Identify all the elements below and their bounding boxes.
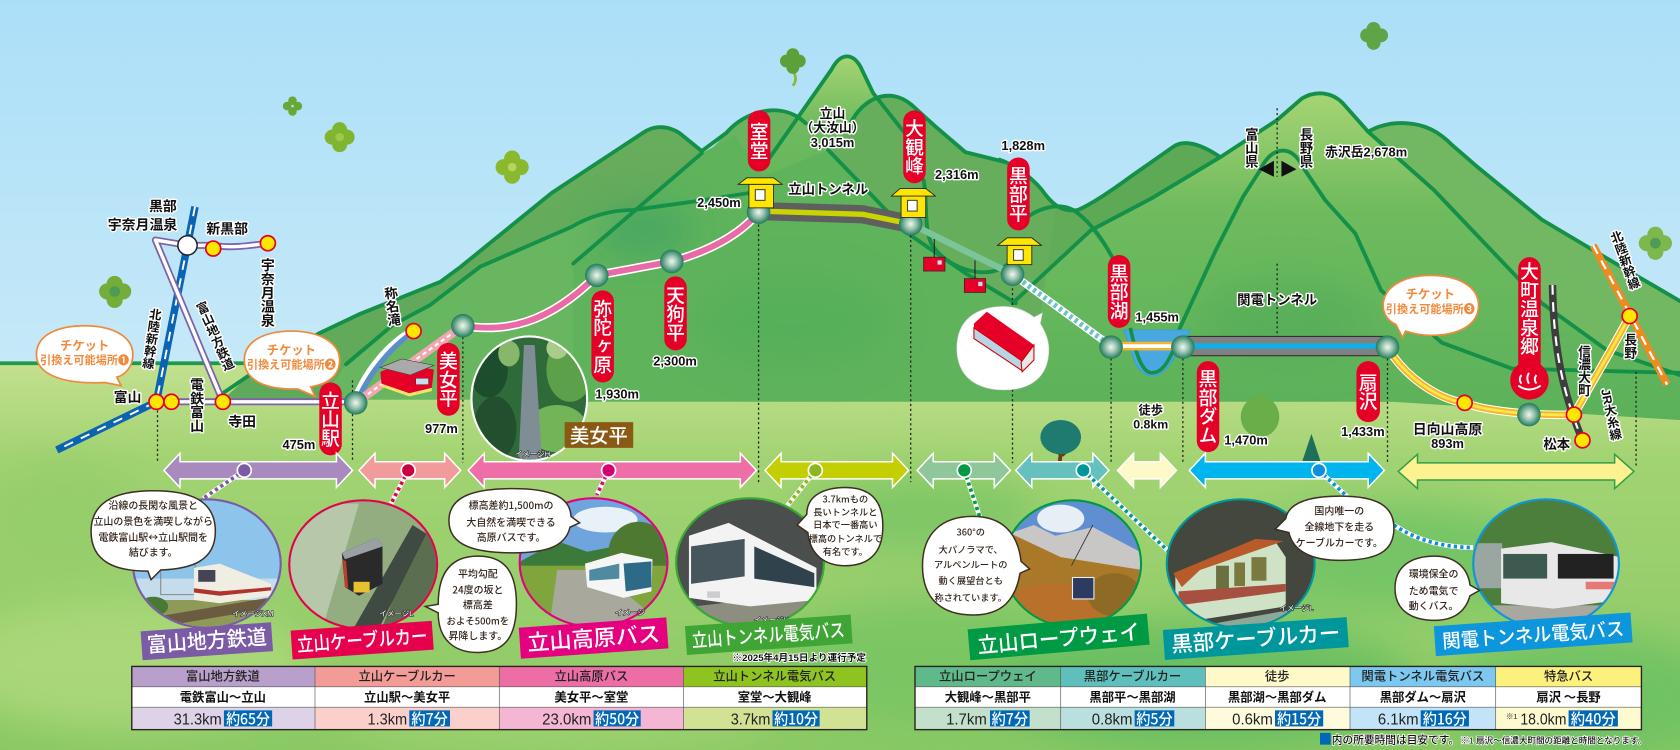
clover: [496, 151, 529, 184]
banner: Tateyama cable car: 立山ケーブルカー: [296, 621, 428, 658]
connector purple: [204, 470, 244, 498]
label: 北陸新幹線: [140, 307, 162, 371]
label: 長野: [1622, 333, 1637, 359]
bubble: Kanden bus: [1395, 556, 1480, 620]
bubble: Kurobe cable: 全線地下を走る: [1304, 518, 1374, 533]
pill: Tengudaira: 天狗平: [662, 285, 689, 342]
tree: deep teal: [1040, 420, 1081, 471]
left second ridge fill: [321, 193, 759, 400]
label: 黒部: [149, 198, 177, 214]
altitude: 1,455m: [1135, 309, 1179, 324]
arrow: Toyama Chiho Railway: [164, 453, 352, 488]
headers: 立山高原バス: [554, 666, 628, 684]
ticket bubble 1: 引換え可能場所❶: [40, 353, 129, 367]
bubble: ropeway: 動く展望台とも: [938, 573, 1003, 587]
routes: 室堂～大観峰: [738, 687, 812, 705]
Kanden tunnel: [1183, 337, 1388, 356]
route cells: [132, 687, 867, 707]
connector magenta: [597, 470, 609, 495]
time tags: 約5分: [1136, 707, 1173, 729]
caption: イメージH: [515, 449, 550, 458]
lake: [1124, 330, 1190, 376]
label: Tateyama summit: （大汝山）: [800, 120, 865, 135]
bubble: Kurobe cable: 国内唯一の: [1314, 502, 1364, 517]
section arrows: [164, 453, 1634, 489]
routes: 美女平～室堂: [554, 687, 628, 705]
bubble: Toyama railway: 結びます。: [129, 544, 178, 559]
ticket bubble 3: [1383, 275, 1479, 338]
Kurobe small ridge fill: [1012, 206, 1112, 303]
pill: Ogizawa: [1355, 361, 1382, 422]
speech bubbles: [91, 488, 1480, 652]
connector dots: [237, 463, 1326, 477]
ticket bubble 1: [36, 326, 133, 386]
bubble: Toyama railway: 沿線の長閑な風景と: [108, 497, 198, 512]
arrow: express bus: [1398, 454, 1634, 489]
bubble: ropeway: [922, 516, 1030, 615]
distances: 6.1km: [1378, 710, 1419, 728]
headers: [939, 666, 1593, 684]
time tags: [990, 707, 1618, 729]
house: Kurobedaira: [998, 238, 1041, 265]
banner: Kanden tunnel electric bus: 関電トンネル電気バス: [1441, 613, 1625, 654]
connector green: [786, 470, 815, 507]
main centre mountain fill: [1012, 93, 1680, 420]
arrow: walk: [1118, 453, 1176, 488]
Unazuki interchange: [178, 236, 197, 255]
bubble: highland bus: 高原バスです。: [477, 529, 545, 544]
routes: [180, 687, 812, 705]
arrow: highland bus: [468, 453, 756, 488]
station houses: [738, 178, 1041, 265]
routes: 大観峰～黒部平: [945, 687, 1031, 705]
distances: 18.0km: [1520, 710, 1566, 728]
distances: [174, 710, 770, 728]
photo: ropeway: [1012, 499, 1142, 622]
Bijodaira label: 美女平: [570, 425, 628, 447]
footnote: 内の所要時間は目安です。: [1332, 734, 1459, 747]
headers: 特急バス: [1544, 666, 1593, 684]
grid: [915, 666, 1641, 730]
bubble: tunnel bus: [797, 488, 883, 566]
photo: Kurobe cable car: [1166, 498, 1316, 632]
Tateyama cable car icon: [380, 359, 434, 396]
label: 日向山高原: [1413, 421, 1482, 437]
place labels: [108, 106, 1642, 452]
time tags: 約65分: [226, 707, 270, 729]
horizon line: [0, 361, 346, 365]
bubble: cable car: 標高差: [463, 597, 493, 612]
label: 長野県: [1298, 128, 1313, 169]
station pills: [317, 110, 1549, 455]
bubble: tunnel bus: 長いトンネルと: [813, 504, 877, 518]
left back ridge fill: [223, 127, 707, 400]
mountain wash texture: [596, 207, 1371, 364]
label: Tateyama summit: 3,015m: [811, 135, 854, 150]
clover: [1360, 22, 1388, 50]
Shomyo cable: [356, 331, 414, 400]
caption: イメージH: [1571, 617, 1607, 626]
bubble: cable car: 平均勾配: [458, 565, 498, 580]
connector teal: [1083, 470, 1168, 551]
Tateyama foreground slope fill: [573, 135, 1016, 402]
dotted altitude guides: [158, 108, 1636, 482]
bubble: highland bus: 標高差約1,500mの: [469, 497, 554, 512]
house: Murodo: [738, 178, 782, 208]
routes: 立山駅～美女平: [364, 687, 450, 705]
far right mountain fill: [1361, 123, 1680, 420]
trees: [1040, 396, 1323, 477]
caption: イメージL: [1279, 604, 1313, 613]
time tags: 約15分: [1277, 707, 1321, 729]
distances: ※1: [1506, 712, 1518, 721]
highland bus road: [463, 212, 759, 328]
headers: 立山ケーブルカー: [358, 666, 456, 684]
tree: conifer: [1300, 434, 1323, 477]
table right: [915, 666, 1641, 730]
bubble: Kurobe cable car: [957, 306, 1049, 390]
label: 富山県: [1243, 128, 1259, 169]
bubble: ropeway: アルペンルートの: [934, 557, 1007, 571]
bubble: highland bus: 大自然を満喫できる: [466, 514, 556, 529]
bubble: cable car: 24度の坂と: [452, 582, 503, 597]
house: Daikanbo: [891, 189, 935, 218]
JR Oito line: [1552, 285, 1582, 440]
photo: Kanden bus: [1472, 498, 1622, 632]
bubble: ropeway: 大パノラマで、: [939, 542, 1003, 556]
ropeway: [911, 224, 1012, 274]
grid: [132, 666, 867, 730]
pill: Murodo: [746, 110, 773, 171]
label: 宇奈月温泉: [108, 216, 177, 232]
small stations yellow: [149, 236, 1637, 448]
altitude: 2,300m: [653, 353, 697, 368]
photo: cable car: [287, 498, 439, 632]
photo: train: [129, 498, 289, 632]
sky: [0, 0, 1680, 370]
ridge outlines: [223, 56, 1680, 393]
frame: [915, 666, 1641, 730]
label: 寺田: [228, 413, 256, 429]
prefecture border arrows: [1259, 161, 1296, 177]
photo: highland bus: [519, 497, 669, 632]
banner: Tateyama highland bus: 立山高原バス: [526, 617, 661, 658]
altitude: 893m: [1431, 436, 1464, 451]
ground: [0, 363, 1680, 750]
Toyama Chiho Railway: [155, 240, 356, 402]
clovers: [99, 22, 1672, 308]
routes: [945, 687, 1601, 705]
frame: [132, 666, 867, 730]
time tags: [224, 707, 820, 729]
ropeway gondolas: [924, 239, 986, 292]
main sphere nodes: [344, 200, 1541, 426]
table left: [132, 666, 867, 730]
banner: Tateyama tunnel electric bus: 立山トンネル電気バス: [691, 615, 846, 653]
caption: イメージH: [754, 616, 789, 625]
headers: 富山地方鉄道: [186, 666, 260, 684]
caption: イメージ: [615, 608, 645, 617]
pill: Omachi Onsen: [1510, 257, 1549, 400]
altitude: 1,828m: [1001, 138, 1045, 153]
label: 富山: [114, 389, 141, 405]
banners: [141, 612, 1633, 661]
lake valley line: [1130, 328, 1178, 373]
bubble: tunnel bus: 日本で一番高い: [813, 517, 878, 531]
routes: 黒部平～黒部湖: [1089, 687, 1176, 705]
headers: [186, 666, 836, 684]
bubble: Kurobe cable: [1275, 496, 1394, 560]
caption: イメージL: [379, 609, 413, 618]
label: 富山地方鉄道: [192, 299, 236, 374]
distances: 0.6km: [1232, 710, 1273, 728]
bubble: tunnel bus: 有名です。: [823, 544, 868, 558]
arrow: ropeway: [917, 453, 1010, 488]
Shinkansen line west: [57, 207, 195, 450]
Tateyama peak fill: [763, 56, 943, 246]
Bijodaira label: [565, 422, 633, 448]
label: 電鉄富山: [189, 377, 205, 433]
label: JR大糸線: [1598, 387, 1623, 442]
stations: [149, 200, 1637, 448]
label: 新黒部: [206, 221, 248, 237]
bubble: Kanden bus: ため電気で: [1409, 583, 1459, 598]
pill: Murodo: 室堂: [746, 122, 773, 160]
footnote: [1320, 733, 1646, 747]
time tags: 約16分: [1423, 707, 1467, 729]
time cells: [915, 707, 1641, 730]
connector crimson: [391, 470, 408, 504]
time tags: 約40分: [1571, 707, 1616, 729]
pill: Midagahara: 弥陀ヶ原: [589, 298, 616, 374]
Daikanbo ridge fill: [828, 96, 1056, 321]
label: 立山トンネル: [788, 181, 868, 197]
label: 宇奈月温泉: [260, 257, 276, 328]
Hokuriku Shinkansen east: [1593, 245, 1667, 385]
walk section: [1111, 342, 1183, 350]
label: 信濃大町: [1576, 345, 1591, 397]
altitude: 2,450m: [697, 195, 741, 210]
headers: 黒部ケーブルカー: [1084, 666, 1181, 684]
clover: [325, 122, 355, 152]
bubble: Kurobe cable: ケーブルカーです。: [1296, 534, 1383, 549]
bubble: Toyama railway: [91, 491, 215, 580]
pill: Kurobedaira: 黒部平: [1005, 166, 1032, 222]
arrow: Tateyama cable car: [359, 453, 461, 488]
bubble: cable car: [425, 556, 516, 652]
pill: Kurobeko: 黒部湖: [1106, 263, 1133, 320]
label: Tateyama summit: [800, 106, 865, 150]
lower ground wash: [0, 461, 1680, 750]
distances: 0.8km: [1092, 710, 1132, 728]
label: 0.8km: [1133, 418, 1168, 432]
distances: 1.3km: [368, 710, 407, 728]
bubble: Toyama railway: 電鉄富山駅↔立山駅間を: [98, 529, 208, 544]
label: Tateyama summit: 立山: [820, 106, 845, 121]
ticket bubble 2: [244, 331, 340, 396]
headers: 立山トンネル電気バス: [713, 666, 836, 684]
route cells: [915, 687, 1641, 707]
ticket bubble 2: 引換え可能場所❷: [247, 358, 336, 372]
pill: Kurobe Dam: 黒部ダム: [1195, 369, 1222, 444]
distances: 31.3km: [174, 710, 222, 728]
gondola: [964, 260, 986, 292]
label: 北陸新幹線: [1607, 229, 1642, 292]
ticket bubbles: [36, 275, 1479, 396]
bubble: cable car: 昇降します。: [448, 628, 507, 643]
banner: Kurobe cable car: 黒部ケーブルカー: [1170, 616, 1341, 659]
banner: Tateyama ropeway: 立山ロープウェイ: [976, 615, 1141, 660]
routes: 黒部ダム～扇沢: [1380, 687, 1467, 705]
routes: 扇沢 ～長野: [1536, 687, 1601, 705]
clover: [283, 96, 302, 116]
bubble: tunnel bus: 3.7kmもの: [823, 491, 868, 505]
arrow: Tateyama tunnel bus: [765, 453, 909, 488]
second back peak fill: [686, 110, 820, 268]
label: 赤沢岳2,678m: [1325, 144, 1407, 159]
bubble: Toyama railway: 立山の景色を満喫しながら: [93, 513, 213, 528]
ticket bubble 3: 引換え可能場所❸: [1386, 302, 1475, 316]
label: 関電トンネル: [1237, 292, 1317, 307]
time cells: [132, 707, 867, 730]
Kurobe cable: [1012, 274, 1111, 346]
altitude: 2,316m: [935, 167, 979, 182]
tree: light green: [1241, 396, 1279, 441]
distances: 1.7km: [946, 710, 987, 728]
photo: tunnel trolley bus: [675, 497, 825, 632]
time tags: 約10分: [774, 707, 818, 729]
gondola: [924, 239, 945, 271]
local rail network: [57, 207, 1667, 450]
express bus road: [1388, 316, 1630, 415]
time tags: 約50分: [595, 707, 640, 729]
clover with stem: [780, 48, 806, 86]
note: operation date: ※2025年4月15日より運行予定: [733, 652, 866, 664]
clover: [1639, 227, 1672, 260]
bubble: highland bus: [449, 489, 580, 553]
altitude: 475m: [282, 437, 315, 452]
headers: 関電トンネル電気バス: [1361, 666, 1484, 684]
pill: Omachi Onsen: 大町温泉郷: [1516, 261, 1543, 355]
distances: [946, 710, 1566, 728]
bubble: Kanden bus: 動くバス。: [1409, 598, 1458, 613]
caption: イメージXM: [232, 609, 273, 618]
ticket bubble 2: チケット: [267, 344, 316, 358]
altitude: 1,433m: [1341, 424, 1385, 439]
pill: Tateyama: 立山駅: [317, 390, 344, 448]
Tateyama cable car truss: [356, 326, 463, 403]
time tags: 約7分: [411, 707, 448, 729]
time tags: 約7分: [992, 707, 1028, 729]
ticket bubble 1: チケット: [60, 339, 109, 353]
arrow: Kurobe cable: [1016, 453, 1109, 488]
bubble: ropeway: 称されています。: [934, 590, 1007, 604]
footnote: ※1 扇沢～信濃大町間の距離と時間となります。: [1460, 735, 1646, 746]
distances: 3.7km: [731, 710, 770, 728]
bubble: Kanden bus: 環境保全の: [1409, 565, 1459, 580]
headers: 立山ロープウェイ: [939, 666, 1037, 684]
Tateyama tunnel: [759, 211, 911, 224]
altitude: 977m: [425, 421, 458, 436]
mountains: [223, 56, 1680, 420]
ticket bubble 3: チケット: [1406, 287, 1455, 301]
bubble: ropeway: 360°の: [956, 525, 985, 539]
pill: Bijodaira: 美女平: [435, 351, 462, 407]
header cells: [132, 666, 867, 687]
pill: Daikanbo: 大観峰: [901, 118, 928, 175]
bubble: tunnel bus: 標高のトンネルで: [809, 531, 882, 545]
connector rope: [964, 470, 980, 519]
connectors: [204, 470, 1473, 551]
arrow: Kanden tunnel bus: [1189, 453, 1384, 488]
routes: 黒部湖～黒部ダム: [1228, 687, 1326, 705]
banner: Toyama Chiho Railway: 富山地方鉄道: [146, 621, 268, 659]
clover: [99, 276, 131, 308]
altitude: 1,470m: [1224, 433, 1268, 448]
Kurobe back ridge fill: [1012, 143, 1232, 321]
routes: 電鉄富山～立山: [180, 687, 266, 705]
Bijodaira photo: [469, 334, 594, 463]
distances: 23.0km: [542, 710, 591, 728]
headers: 徒歩: [1265, 666, 1289, 684]
connector blue: [1319, 470, 1473, 548]
label: 徒歩: [1138, 403, 1163, 418]
bubble: cable car: およそ500mを: [447, 614, 509, 628]
header cells: [915, 666, 1641, 687]
pill: Ogizawa: 扇沢: [1355, 373, 1382, 410]
label: 松本: [1543, 436, 1571, 452]
label: 称名滝: [381, 285, 401, 328]
altitude: 1,930m: [595, 387, 639, 402]
